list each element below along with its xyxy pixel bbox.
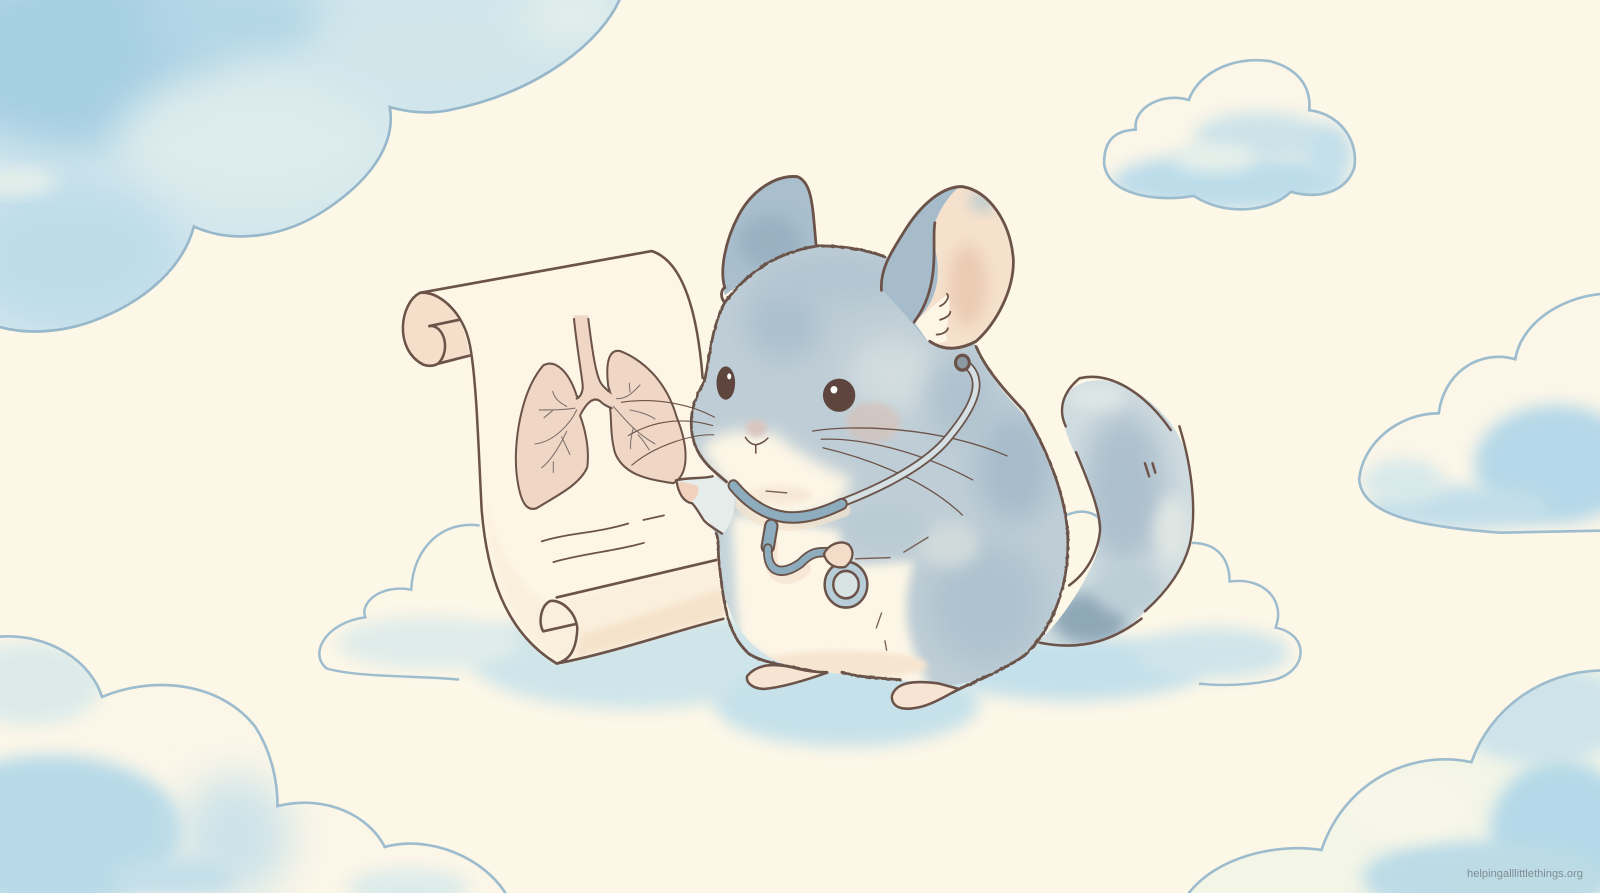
right paw: [824, 542, 853, 567]
right whiskers: [813, 428, 1007, 515]
ear inner: [914, 187, 1013, 349]
left eye: [717, 366, 735, 400]
scroll text lines: [542, 515, 664, 562]
ear piece: [956, 355, 969, 370]
belly fur marks: [766, 491, 928, 650]
scroll shading: [483, 481, 725, 664]
cloud: centre, under the chinchilla: [319, 512, 1301, 747]
scroll lower band: [577, 589, 725, 658]
right lung: [607, 351, 686, 483]
cloud: bottom left: [0, 633, 515, 893]
scroll with lungs diagram: [403, 251, 727, 664]
cloud: right: [1352, 286, 1600, 541]
left whiskers: [621, 401, 714, 465]
lungs: [516, 315, 686, 509]
scroll outline: [403, 251, 723, 664]
right foot: [892, 682, 959, 709]
bronchi: [535, 383, 655, 472]
dark tube: [733, 486, 842, 518]
trachea outline: [574, 319, 612, 414]
muzzle cream: [701, 431, 852, 530]
light tube: [844, 367, 976, 502]
scroll paper: [435, 251, 727, 664]
stethoscope chest piece: [825, 562, 867, 608]
cloud: bottom right: [1179, 663, 1600, 893]
stethoscope: [733, 355, 976, 576]
left arm pointing: [676, 476, 734, 534]
scroll top roll: [403, 293, 469, 366]
chinchilla: [621, 176, 1193, 709]
cloud: top right: [1102, 58, 1356, 211]
trachea: [570, 315, 620, 415]
right ear: [881, 187, 1013, 349]
watermark: helpingalllittlethings.org: [1467, 868, 1583, 880]
body and head fill: [691, 246, 1068, 689]
right eye: [823, 379, 855, 412]
back ear: [722, 176, 816, 302]
chest and belly cream: [732, 515, 931, 689]
tail: [1038, 377, 1193, 646]
left lung: [516, 364, 588, 509]
cheek blush: [846, 402, 900, 443]
ear tuft: [914, 294, 949, 343]
cloud: top left: [0, 0, 628, 342]
tube shadow: [742, 504, 844, 576]
left foot: [747, 665, 828, 689]
body outline: [691, 246, 1068, 693]
nose: [745, 420, 768, 453]
